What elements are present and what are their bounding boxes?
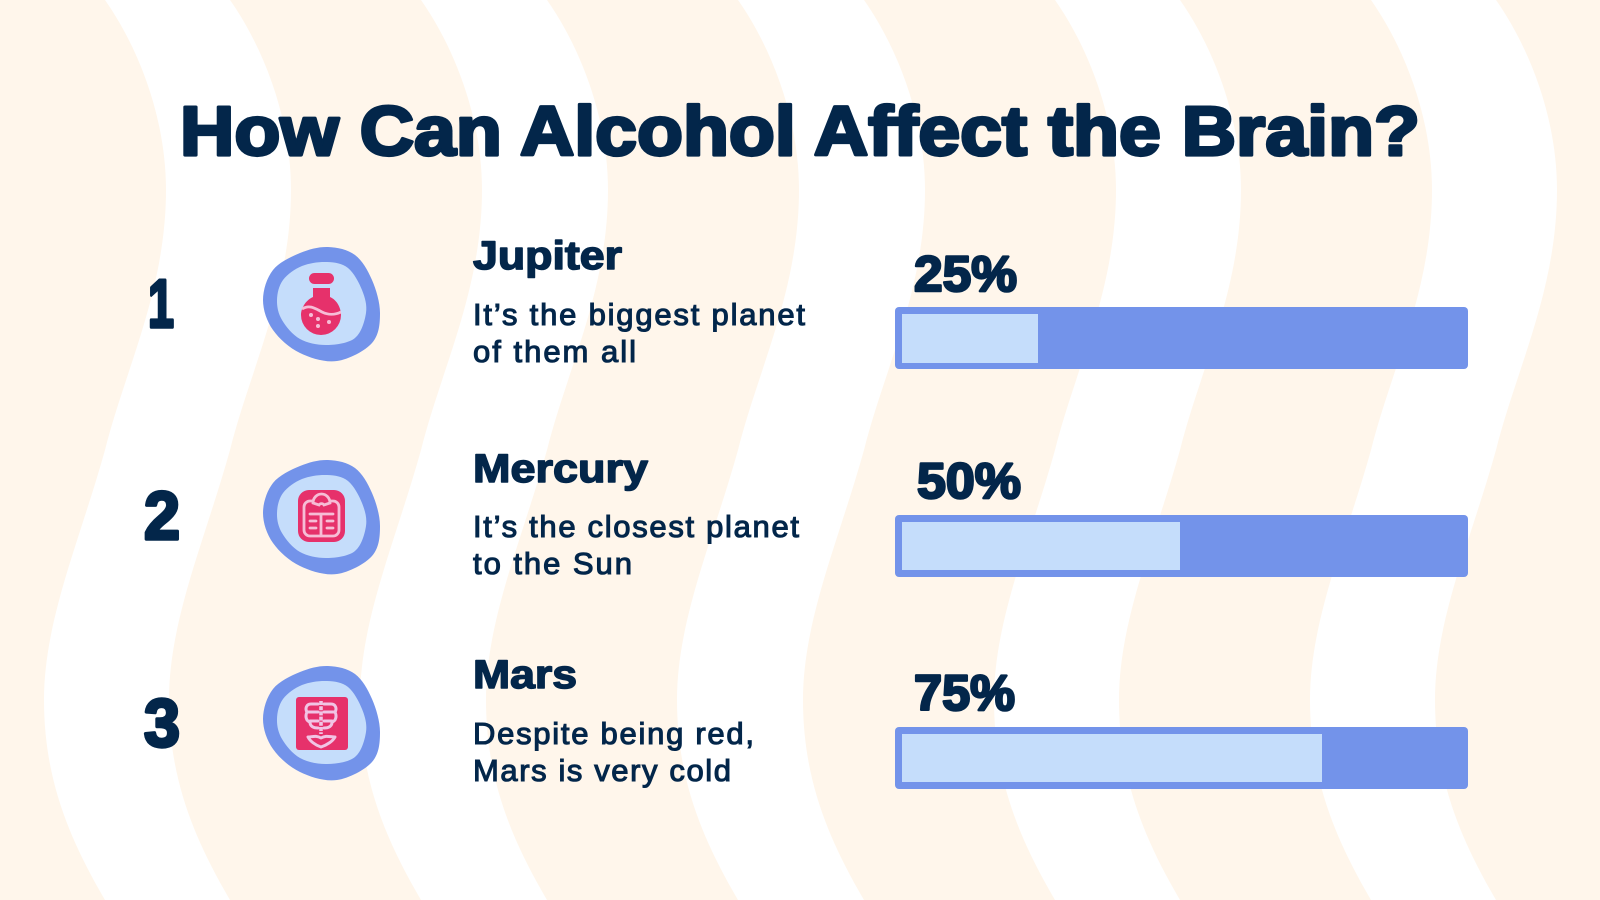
icon: weighing scale in blob [263, 460, 380, 574]
description: Mercury: It’s the closest planet [473, 509, 799, 544]
value: 25%: 25% [914, 246, 1017, 302]
description: Mercury: to the Sun [473, 546, 632, 581]
description: Jupiter [473, 297, 805, 369]
icon: ribcage x-ray in blob [263, 666, 380, 780]
description: Mercury [473, 509, 799, 581]
number 3: 3 [144, 685, 180, 761]
heading: Mars: Mars [473, 653, 577, 697]
heading: Mercury: Mercury [473, 447, 649, 491]
heading: Jupiter: Jupiter [473, 234, 622, 278]
value: 50%: 50% [917, 453, 1021, 509]
row 2: Mercury [144, 447, 1468, 581]
description: Mars: Despite being red, [473, 716, 754, 751]
description: Mars [473, 716, 754, 788]
icon: flask in blob [263, 247, 380, 361]
row 1: Jupiter [148, 234, 1468, 369]
value: 75%: 75% [914, 665, 1015, 721]
description: Mars: Mars is very cold [473, 753, 731, 788]
progress bar: 75% [895, 727, 1468, 789]
number 1: 1 [148, 266, 174, 342]
number 2: 2 [144, 478, 180, 554]
row 3: Mars [144, 653, 1468, 789]
title: How Can Alcohol Affect the Brain? [180, 92, 1420, 170]
description: Jupiter: It’s the biggest planet [473, 297, 805, 332]
progress bar: 50% [895, 515, 1468, 577]
description: Jupiter: of them all [473, 334, 636, 369]
progress bar: 25% [895, 307, 1468, 369]
